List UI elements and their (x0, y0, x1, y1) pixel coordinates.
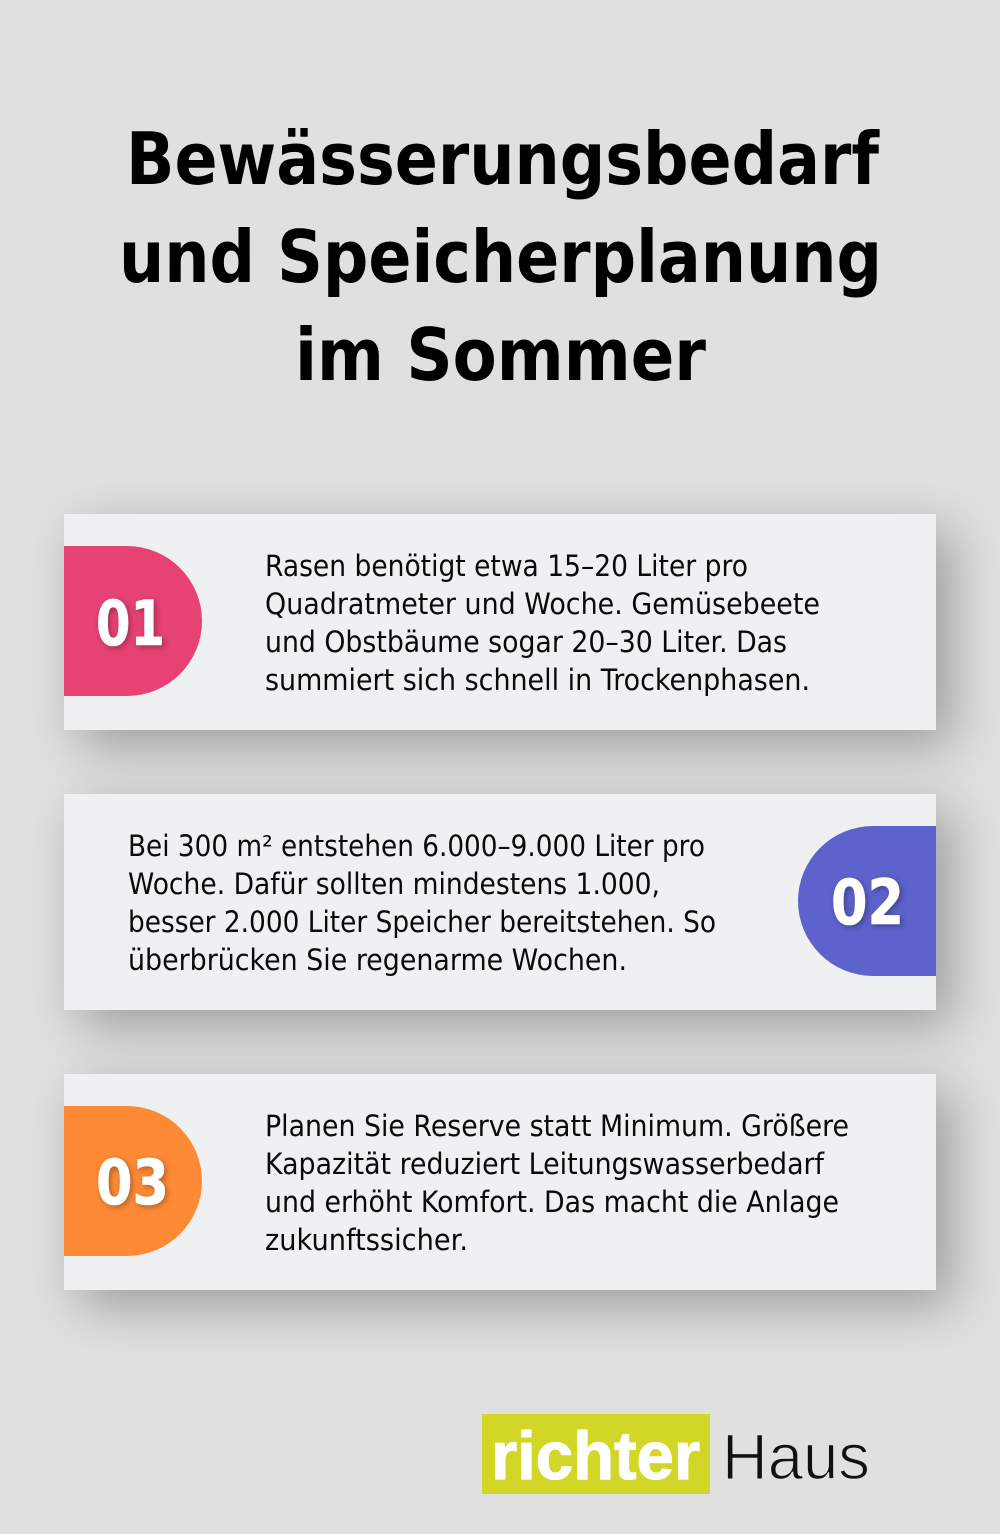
badge 02 (798, 826, 936, 976)
text block 02: Bei 300 m² entstehen 6.000–9.000 Liter pro (128, 829, 705, 863)
panel: step 02 (64, 794, 936, 1010)
text block 03 (265, 1109, 849, 1257)
text block 03: Planen Sie Reserve statt Minimum. Größere (265, 1109, 849, 1143)
badge 01 (64, 546, 202, 696)
text block 02: Woche. Dafür sollten mindestens 1.000, (128, 867, 660, 901)
text block 01: und Obstbäume sogar 20–30 Liter. Das (265, 625, 787, 659)
logo: richter Haus: Haus (722, 1420, 870, 1493)
text block 01: Quadratmeter und Woche. Gemüsebeete (265, 587, 820, 621)
badge 03 (64, 1106, 202, 1256)
title (119, 117, 882, 397)
badge 02: 02 (831, 866, 904, 939)
logo: richter Haus: richter (491, 1418, 700, 1494)
text block 01 (265, 549, 820, 697)
title: Bewässerungsbedarf (126, 117, 880, 201)
text block 02: besser 2.000 Liter Speicher bereitstehen. So (128, 905, 716, 939)
logo: richter Haus (482, 1414, 870, 1494)
title: und Speicherplanung (119, 215, 882, 299)
text block 03: Kapazität reduziert Leitungswasserbedarf (265, 1147, 825, 1181)
badge 03: 03 (96, 1146, 169, 1219)
text block 01: summiert sich schnell in Trockenphasen. (265, 663, 810, 697)
panel: step 03 (64, 1074, 936, 1290)
text block 02 (128, 829, 716, 977)
badge 01: 01 (96, 587, 165, 660)
text block 03: und erhöht Komfort. Das macht die Anlage (265, 1185, 839, 1219)
text block 03: zukunftssicher. (265, 1223, 468, 1257)
title: im Sommer (295, 313, 706, 397)
text block 01: Rasen benötigt etwa 15–20 Liter pro (265, 549, 748, 583)
text block 02: überbrücken Sie regenarme Wochen. (128, 943, 627, 977)
panel: step 01 (64, 514, 936, 730)
